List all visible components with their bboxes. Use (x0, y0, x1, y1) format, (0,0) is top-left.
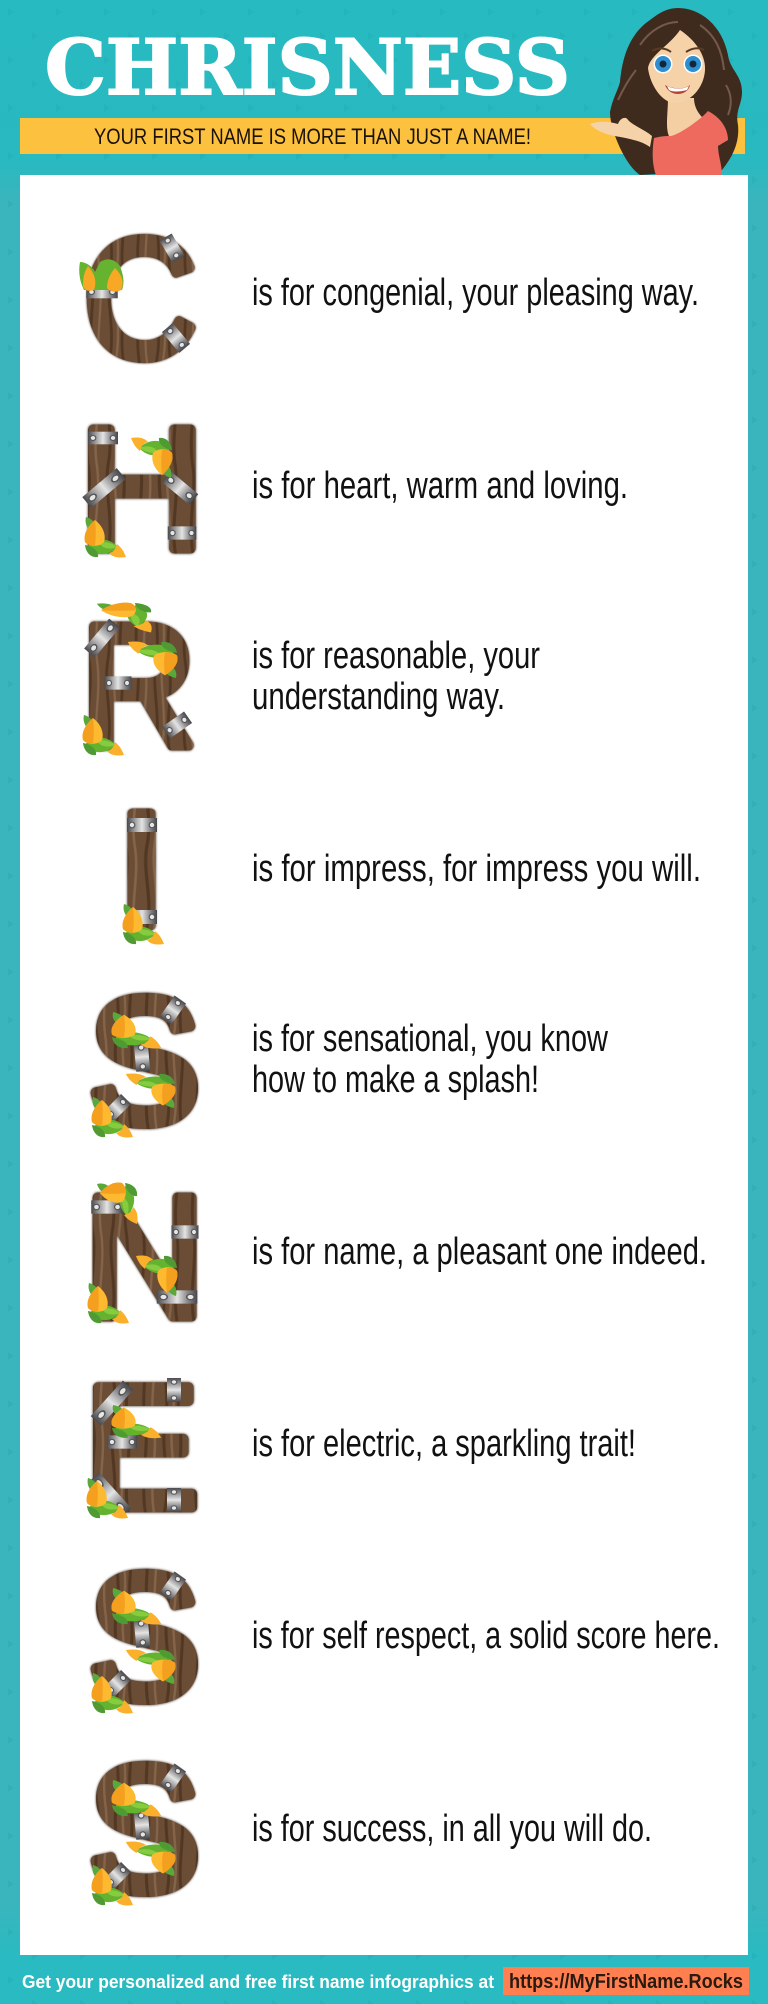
footer URL badge: https://MyFirstName.Rocks (509, 1971, 743, 1993)
title: CHRISNESS (45, 23, 570, 112)
row: letter H (79, 392, 628, 585)
subtitle banner: YOUR FIRST NAME IS MORE THAN JUST A NAME! (94, 124, 531, 149)
row: second letter S (88, 1537, 720, 1736)
letter R illustration: R (81, 590, 196, 783)
letter E illustration: E (84, 1350, 199, 1544)
subtitle banner (20, 118, 745, 154)
letter N illustration: N (84, 1161, 205, 1354)
text: H line: is for heart, warm and loving. (252, 465, 628, 507)
row: letter I (116, 778, 701, 960)
row: letter R (81, 590, 540, 783)
text: third S line: is for success, in all you will do. (252, 1808, 652, 1850)
row: third letter S (88, 1729, 652, 1928)
row: letter E (84, 1350, 636, 1544)
row: letter C (79, 206, 699, 393)
text: R lines: is for reasonable, your (252, 635, 540, 677)
letter S illustration: S (88, 1537, 201, 1736)
letter S illustration: S (88, 961, 201, 1160)
text: R lines (252, 635, 540, 718)
footer text: Get your personalized and free first name infographics at (22, 1972, 494, 1992)
text: S lines (252, 1018, 608, 1101)
illustration: woman presenting (590, 8, 742, 175)
letter C illustration: C (84, 206, 197, 393)
text: S lines: is for sensational, you know (252, 1018, 608, 1060)
letter S illustration: S (88, 1729, 201, 1928)
row: letter N (84, 1161, 707, 1354)
letter H illustration: H (79, 392, 205, 585)
row: letter S (88, 961, 608, 1160)
letter I illustration: I (116, 778, 167, 960)
text: E line: is for electric, a sparkling trait! (252, 1423, 636, 1465)
text: R lines: understanding way. (252, 676, 505, 718)
text: S lines: how to make a splash! (252, 1059, 539, 1101)
